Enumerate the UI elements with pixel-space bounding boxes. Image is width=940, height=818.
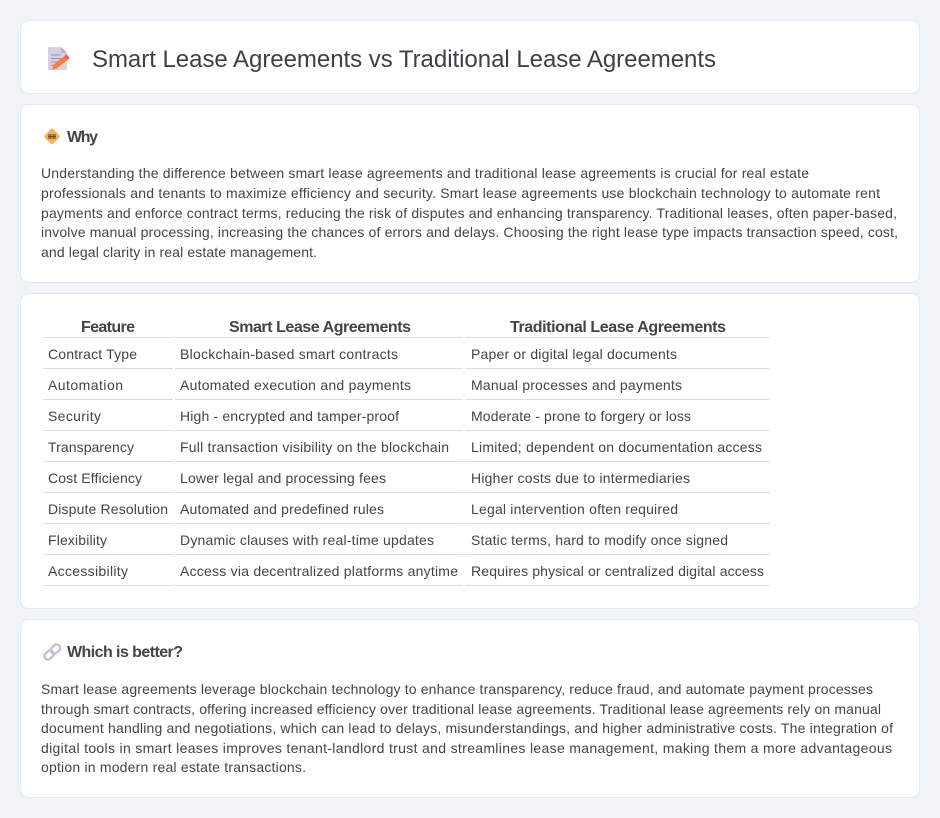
row: transparency: Limited; dependent on documentation access (471, 439, 762, 455)
row: contract type: Contract Type (48, 346, 137, 362)
row: dispute resolution: Automated and predefined rules (180, 501, 384, 517)
heading: which is better: Which is better? (67, 644, 183, 661)
row: flexibility: Flexibility (48, 532, 107, 548)
row: cost efficiency: Higher costs due to intermediaries (471, 470, 690, 486)
row: transparency (48, 439, 762, 455)
text block: which is better paragraph: option in modern real estate transactions. (41, 759, 306, 775)
row: automation: Automation (48, 377, 123, 393)
row: cost efficiency: Cost Efficiency (48, 470, 142, 486)
row: automation (48, 377, 682, 393)
row: contract type: Blockchain-based smart contracts (180, 346, 398, 362)
text block: why paragraph: professionals and tenants to maximize efficiency and security. Smart lease agreements use blockchain technology to automate rent (41, 185, 880, 201)
icon: diamond road sign (44, 128, 60, 145)
row: cost efficiency: Lower legal and processing fees (180, 470, 386, 486)
text block: why paragraph: and legal clarity in real estate management. (41, 244, 317, 260)
row: accessibility: Requires physical or centralized digital access (471, 563, 764, 579)
row: cost efficiency (48, 470, 690, 486)
text block: why paragraph: Understanding the difference between smart lease agreements and traditional lease agreements is crucial for real estate (41, 165, 809, 181)
row: security: Security (48, 408, 101, 424)
text block: why paragraph (41, 165, 898, 260)
row: security: Moderate - prone to forgery or loss (471, 408, 691, 424)
text block: which is better paragraph: through smart contracts, offering increased efficiency over traditional lease agreements. Traditional lease agreements rely on manual (41, 701, 881, 717)
row: flexibility (48, 532, 728, 548)
row: contract type (48, 346, 677, 362)
icon: document with pencil (48, 47, 70, 70)
row: accessibility (48, 563, 764, 579)
row: security: High - encrypted and tamper-proof (180, 408, 399, 424)
text block: why paragraph: involve manual processing, increasing the chances of errors and delays. Choosing the right lease type impacts transaction speed, cost, (41, 224, 898, 240)
table header (81, 319, 726, 336)
row: accessibility: Accessibility (48, 563, 128, 579)
row: automation: Manual processes and payments (471, 377, 682, 393)
text block: which is better paragraph: Smart lease agreements leverage blockchain technology to enhance transparency, reduce fraud, and automate payment processes (41, 681, 873, 697)
row: transparency: Transparency (48, 439, 134, 455)
text block: which is better paragraph: digital tools in smart leases improves tenant-landlord trust and streamlines lease management, making them a more advantageous (41, 740, 892, 756)
panel: which is better (20, 620, 920, 798)
panel: why (20, 104, 920, 282)
panel: title card (20, 20, 920, 94)
panel: comparison table (20, 294, 920, 608)
row: contract type: Paper or digital legal documents (471, 346, 677, 362)
row: transparency: Full transaction visibility on the blockchain (180, 439, 449, 455)
title: Smart Lease Agreements vs Traditional Lease Agreements (92, 46, 716, 73)
table header: Feature (81, 319, 135, 336)
text block: which is better paragraph (41, 681, 893, 775)
text block: why paragraph: payments and enforce contract terms, reducing the risk of disputes and enhancing transparency. Traditional leases, often paper-based, (41, 205, 897, 221)
row: flexibility: Static terms, hard to modify once signed (471, 532, 728, 548)
row: dispute resolution: Legal intervention often required (471, 501, 678, 517)
row: flexibility: Dynamic clauses with real-time updates (180, 532, 434, 548)
heading: why: Why (67, 129, 98, 146)
table header: Traditional Lease Agreements (510, 319, 726, 336)
row: dispute resolution: Dispute Resolution (48, 501, 168, 517)
row: dispute resolution (48, 501, 678, 517)
row: accessibility: Access via decentralized platforms anytime (180, 563, 458, 579)
icon: chain link (43, 643, 62, 661)
row: security (48, 408, 691, 424)
row: automation: Automated execution and payments (180, 377, 411, 393)
text block: which is better paragraph: document handling and negotiations, which can lead to delays, misunderstandings, and higher administrative costs. The integration of (41, 720, 893, 736)
table header: Smart Lease Agreements (229, 319, 411, 336)
